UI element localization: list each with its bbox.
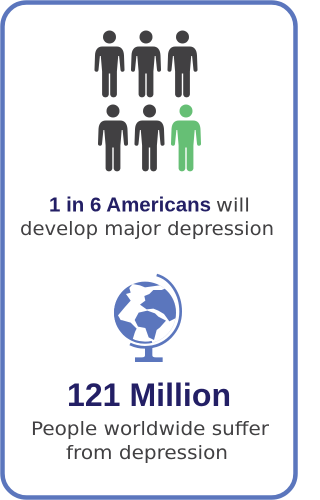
icon: person 4 [98, 104, 128, 171]
text: people worldwide: from depression [66, 442, 228, 464]
text: 1 in 6 Americans: 1 in 6 Americans [49, 194, 211, 216]
icon: highlighted person [171, 104, 201, 171]
people pictogram [94, 30, 201, 171]
stat: 121 Million: 121 Million [67, 377, 231, 413]
icon: person 5 [134, 104, 165, 171]
icon: person 1 [94, 30, 125, 97]
icon: globe [114, 275, 181, 362]
text: 1 in 6 Americans: will [216, 194, 250, 216]
text: 1 in 6 Americans [20, 194, 274, 240]
text: people worldwide: People worldwide suffer [31, 418, 269, 440]
text: people worldwide [31, 418, 269, 464]
text: 1 in 6 Americans: develop major depression [20, 218, 274, 240]
icon: person 2 [131, 30, 161, 97]
icon: person 3 [167, 30, 198, 97]
